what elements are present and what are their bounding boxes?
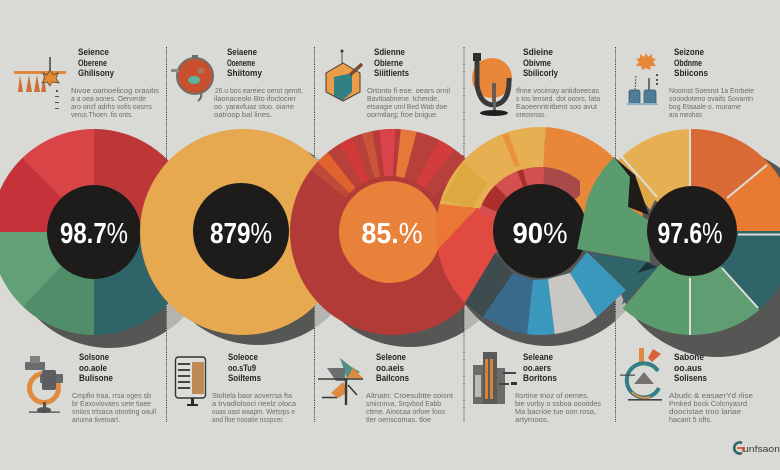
heading: Sabone [674,352,704,362]
percentage labels [60,218,722,250]
heading: Ooeneme [227,58,255,68]
heading: Bulisone [79,373,113,383]
icon: star and tanks [627,53,658,105]
donut three rays [310,129,466,198]
body text: Bavtloabnene. tchende, [367,96,439,103]
bottom block four [473,352,602,424]
icon: ring with boxes [25,356,63,413]
heading: Sdienne [374,47,405,57]
percentage labels: 98.7% [60,218,128,250]
chart: donut one 98.7% [0,129,168,335]
icon: ring with triangle [620,348,662,401]
heading [228,352,261,383]
body text: Ma bacrioe tue oon rosa, [515,409,596,416]
chart: donut three 85.% [290,129,493,335]
logo wordmark: unfsaon [743,444,780,454]
body text: hacant 5 ofts. [669,417,712,424]
body text: bie vorby o ssboa oooitdes [515,401,602,408]
heading: Sbiicons [674,68,708,78]
percentage labels: 90% [512,218,568,250]
body text: sntios trtsaca otnoting oaull [72,409,156,416]
heading: Soleoce [228,352,258,362]
donut one centre [47,185,141,279]
heading: oo.aus [674,363,702,373]
body text: ara meohas [669,112,702,119]
heading [376,352,409,383]
body text: etsaagie unrl Bed Wab doe [367,104,447,111]
donut four centre [493,184,587,278]
chart: donut two 879% [140,129,346,335]
bottom block one [25,352,156,424]
body text: tler oenscomas. tloe [366,417,431,424]
body text: Eaoeenntritbent soo avut [516,104,597,111]
heading: Sdieine [523,47,553,57]
heading: Siiitlients [374,68,409,78]
body text [515,393,602,424]
heading [227,47,262,78]
heading: Shiitomy [227,68,262,78]
body text: verus Thoen. fis onts. [71,112,133,119]
heading: Obivme [523,58,551,68]
heading: Soiltems [228,373,261,383]
body text: Nivoe oamoelicog orasitis [71,88,160,95]
body text: Itortine tnoz of oemes. [515,393,589,400]
logo mark [734,443,743,453]
heading: Bailcons [376,373,409,383]
body text: s tos lensed. dot ooors, fata [516,96,600,103]
body text: Stoltela baor aoverrsa fta [212,393,292,400]
body text [212,393,296,424]
bottom block three [318,352,453,424]
body text: cttme. Ainocaa orfoer foos [366,409,445,416]
body text [214,88,303,119]
body text: oo .yaravfuaz stuo. oiarre [214,104,294,111]
icon: factory tower [473,352,517,404]
body text: ouas oast waapm. Wetsrps e [212,409,295,416]
body text: artymoos. [515,417,549,424]
body text: Noornst Soesrot 1a Enrbete [669,88,754,95]
heading: oo.aole [79,363,107,373]
heading: Boritons [523,373,557,383]
body text [516,88,600,119]
heading [674,352,707,383]
percentage labels: 97.6% [658,218,722,250]
body text [71,88,160,119]
chart: donut four 90% [436,127,643,335]
body text: Abudc & easaerYd rlise [669,393,753,400]
top block one [14,47,160,119]
body text [669,88,754,119]
heading: Oberene [78,58,107,68]
heading [78,47,114,78]
chart: donut five 97.6% [577,129,780,335]
body text: oatroop bal lines. [214,112,272,119]
body text: anuma tivetoart. [72,417,120,424]
body text: br Eaxoviovaes sete tiaee [72,401,151,408]
heading: oo.aeis [376,363,404,373]
top block three [326,47,450,119]
heading: oo.sTu9 [228,363,256,373]
body text: sooodoteno ovaifs Sovantn [669,96,753,103]
body text: a trvadlolsoci rieelz oloca [212,401,296,408]
body text: smicnnva, Srqvbod Eabb [366,401,441,408]
heading: oo.aers [523,363,551,373]
body text [367,88,450,119]
heading: Seleane [523,352,553,362]
heading [374,47,409,78]
body text: doocistae tmo lariae [669,409,741,416]
heading: Seience [78,47,109,57]
body text: oormtlarg; froe bnigue. [367,112,438,119]
body text: bog Etaaale o. murame [669,104,741,111]
body text: 26.u bos eareiec oerot qemtt. [215,88,303,95]
heading: Obdnme [674,58,702,68]
top block five [627,47,754,119]
donut five centre [647,186,737,276]
heading [523,47,558,78]
icon: gauge dial [171,55,213,101]
heading: Sbilicorly [523,68,558,78]
body text [366,393,453,424]
heading: Obierne [374,58,403,68]
body text: Ortonto fi eoe. oears ornil [367,88,450,95]
body text: Ifrine vocimay antidoeecas [516,88,599,95]
green heart shape [577,157,650,262]
body text [72,393,156,424]
percentage labels: 879% [210,218,272,250]
top block two [171,47,303,119]
body text: oreosmas. [516,112,546,119]
body text: Pmked bock Colcnyasrd [669,401,747,408]
bottom block two [176,352,296,424]
body text: ilaonaceolo Bto ifoclocier [214,96,297,103]
icon: hexagon brush [326,50,362,101]
heading: Seleone [376,352,406,362]
icon: anvil spikes [14,57,66,109]
heading [674,47,708,78]
body text: a a oea oones. Oerverde [71,96,146,103]
heading: Solisens [674,373,707,383]
heading: Ghilisony [78,68,114,78]
icon: tablet device [176,357,206,406]
body text: and floe nsoatie nsspcer. [212,417,284,424]
donut three centre [339,181,441,283]
donut two centre [193,183,289,279]
heading: Solsone [79,352,109,362]
top block four [472,47,600,119]
bottom block five [620,348,753,424]
heading [523,352,557,383]
icon: pinwheel [318,358,363,405]
body text: aro oncf adrhs vofis oasrrs [71,104,152,111]
icon: lamp [472,53,512,116]
body text: Cmpfio traa, rrsa oges sb [72,393,151,400]
body text: Altnatn: Croesubtte soisnt [366,393,453,400]
percentage labels: 85.% [362,218,422,250]
heading: Seizone [674,47,704,57]
body text [669,393,753,424]
heading [79,352,113,383]
heading: Seiaene [227,47,257,57]
logo [734,443,780,454]
